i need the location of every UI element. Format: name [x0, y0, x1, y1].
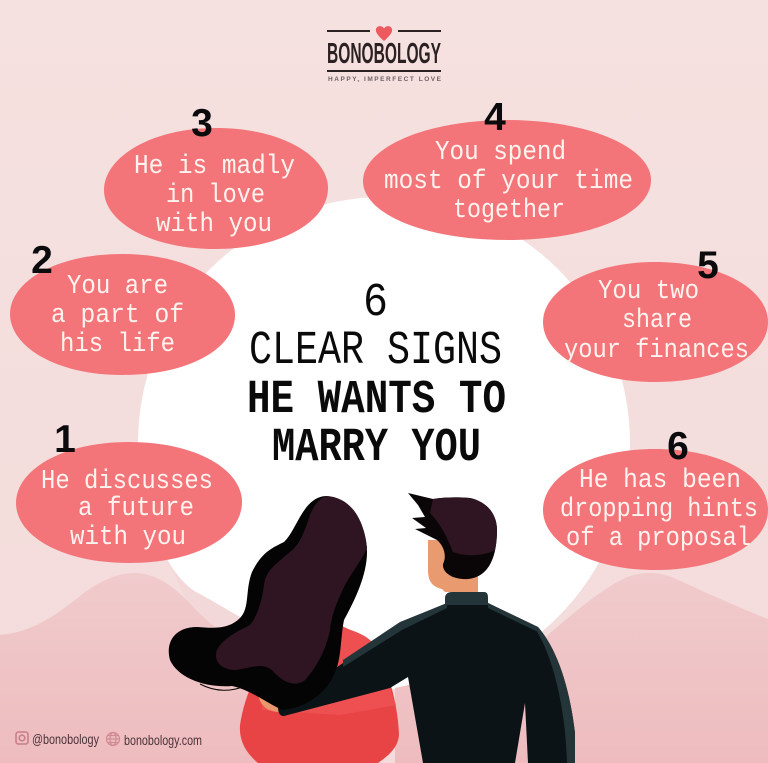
woman hair highlight [216, 496, 367, 684]
woman red top [240, 625, 399, 763]
white central circle [138, 197, 630, 689]
translucent hill band over circle [168, 561, 262, 650]
website text: bonobology.com [124, 733, 202, 748]
bubble 2: his life [60, 330, 175, 360]
bubble 1 [16, 418, 242, 563]
man body [278, 603, 575, 763]
logo tagline: HAPPY, IMPERFECT LOVE [328, 76, 442, 83]
logo wordmark: BONOBOLOGY [327, 38, 441, 70]
left hill [0, 573, 340, 763]
man shoulder highlights [343, 603, 538, 667]
bubble 1: a future [78, 494, 194, 524]
bubble 4: together [453, 196, 565, 226]
number 4: 4 [484, 96, 506, 139]
bubble 3 [104, 102, 328, 249]
man hair highlight [430, 497, 497, 555]
title line: marry you: MARRY YOU [272, 422, 481, 475]
bubble 4: most of your time [384, 167, 633, 197]
bubble 2 [10, 239, 235, 375]
bubble 2: You are [67, 272, 168, 302]
bubble 5 [543, 244, 768, 382]
bubble 4 [363, 96, 651, 240]
handle text: @bonobology [32, 732, 99, 747]
icon: instagram [16, 732, 28, 744]
right hill [395, 573, 768, 763]
bubble 1: He discusses [41, 467, 213, 497]
number 6: 6 [667, 425, 689, 468]
icon: globe [106, 732, 120, 746]
number 5: 5 [697, 244, 719, 287]
logo heart [376, 26, 392, 41]
bubble 3: with you [156, 210, 272, 240]
bubble 4: You spend [435, 138, 566, 168]
man hair dark [408, 493, 497, 579]
logo [327, 26, 442, 83]
bubble 3: He is madly [134, 152, 295, 182]
bubble 6: He has been [579, 466, 741, 496]
bubble 1: with you [70, 523, 186, 553]
bubble 5: share [622, 306, 692, 336]
woman hair outer [169, 496, 367, 710]
title line: clear signs: CLEAR SIGNS [249, 325, 502, 378]
woman stray hair strand [200, 684, 244, 690]
title number: 6 [363, 277, 388, 330]
man collar [445, 592, 488, 605]
couple illustration [169, 493, 575, 763]
number 1: 1 [54, 418, 76, 461]
bubble 5: You two [598, 277, 699, 307]
bubble 6 [543, 425, 768, 570]
man sleeve highlight right [536, 627, 575, 763]
man neck and face [428, 540, 478, 592]
number 3: 3 [191, 102, 213, 145]
number 2: 2 [31, 239, 53, 282]
bubble 2: a part of [51, 301, 184, 331]
central title [247, 277, 506, 475]
woman hand [258, 692, 280, 712]
title line: he wants to: HE WANTS TO [247, 374, 506, 427]
footer social handles [16, 732, 202, 748]
bubble 3: in love [166, 181, 265, 211]
